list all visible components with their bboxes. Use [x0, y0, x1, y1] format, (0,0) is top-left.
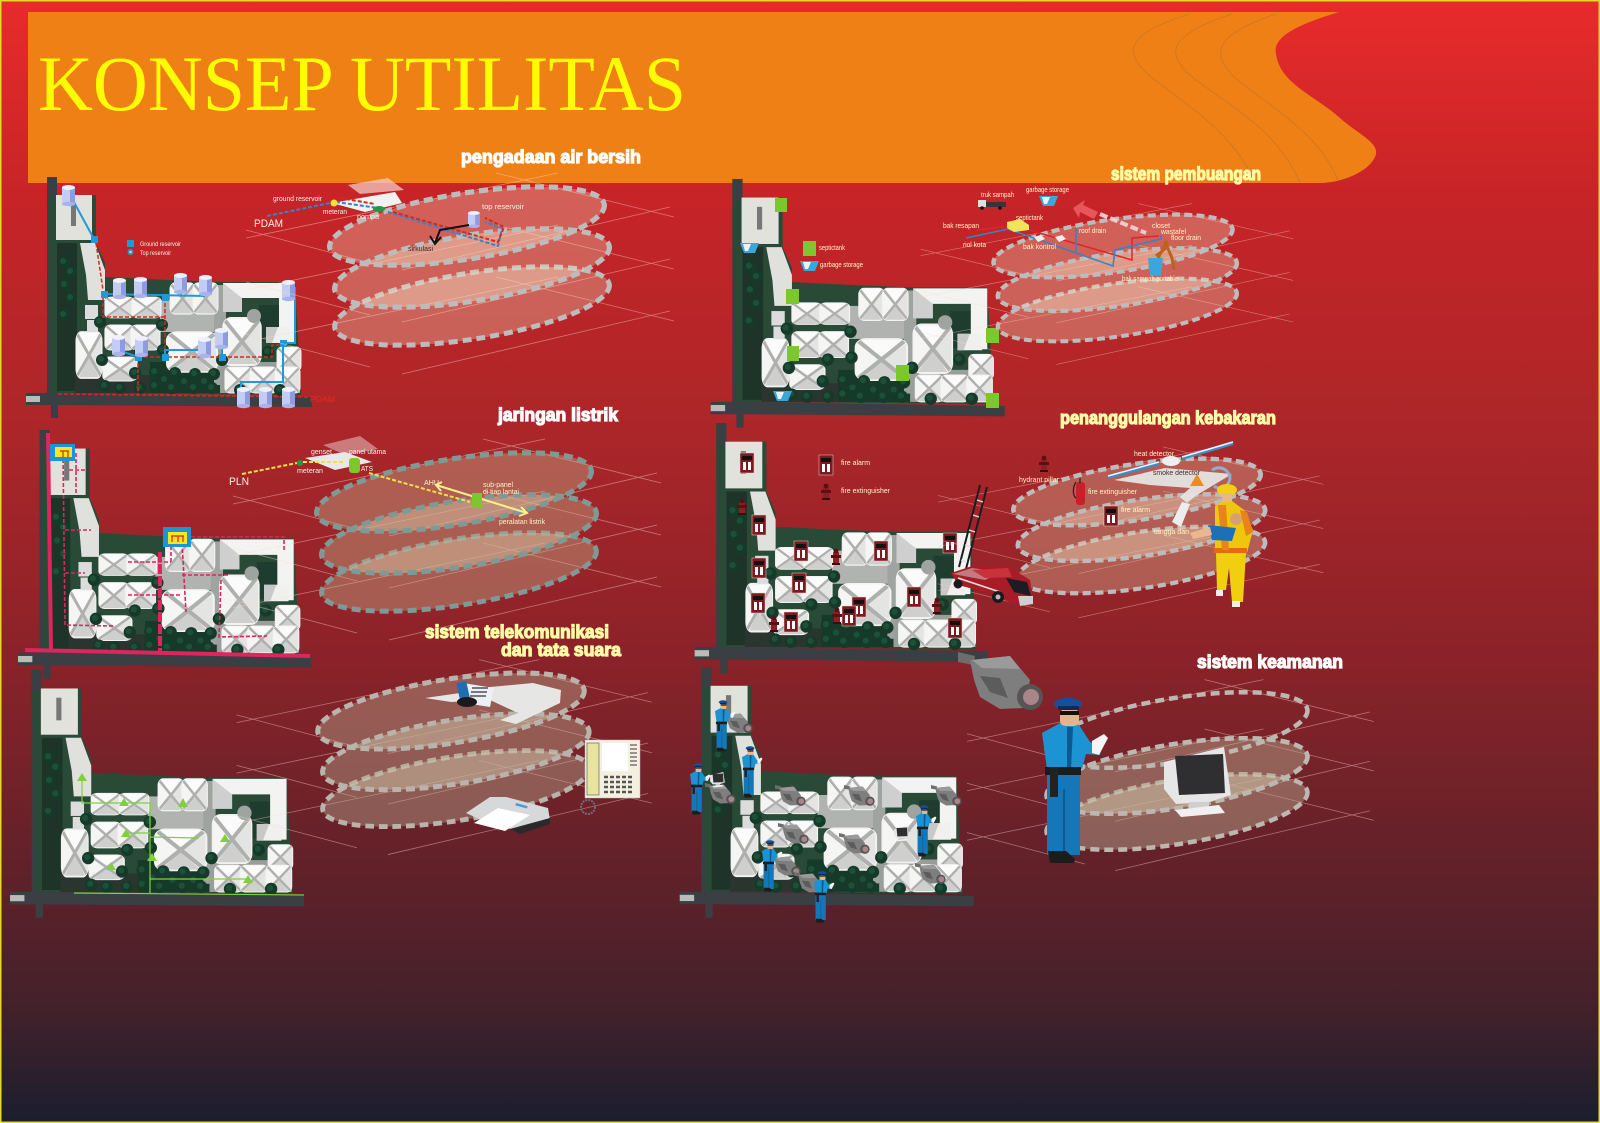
diagram: water flow — [254, 178, 525, 253]
diagram: water flow: top reservoir — [482, 202, 525, 211]
legend: reservoirs — [127, 240, 181, 257]
ellipse stack: floors — [938, 446, 1323, 618]
icon: desk telephone — [581, 740, 640, 814]
panel: sistem keamanan — [680, 651, 1374, 922]
heading: sistem pembuangan: sistem pembuangan — [1111, 163, 1261, 184]
diagram: power flow: meteran — [297, 466, 323, 475]
diagram: waste flow: floor drain — [1171, 233, 1201, 242]
diagram: power flow: AHU — [424, 478, 439, 487]
diagram: water flow: meteran — [323, 207, 347, 216]
diagram: waste flow: roof drain — [1079, 226, 1106, 235]
legend: reservoirs: Ground reservoir — [140, 242, 181, 248]
diagram: waste flow: bak resapan — [943, 221, 979, 230]
label: PDAM red: PDAM — [310, 395, 335, 404]
ellipse stack: floors — [237, 658, 652, 855]
diagram: waste flow: bak kontrol — [1023, 242, 1056, 251]
ellipse stack: floors — [233, 438, 661, 640]
diagram: waste flow — [943, 185, 1201, 283]
diagram: power flow: ATS — [361, 464, 373, 473]
legend: septictank and garbage storage: septictank — [819, 243, 845, 252]
ellipse stack: floors — [967, 678, 1374, 871]
diagram: water flow: PDAM — [254, 218, 283, 230]
diagram: power flow: sub-panel — [483, 480, 513, 489]
panel: sistem pembuangan — [711, 163, 1293, 428]
diagram: water flow: pompa — [357, 212, 380, 221]
site plan: telecom — [10, 670, 304, 918]
title: KONSEP UTILITAS — [38, 40, 686, 127]
diagram: power flow — [229, 436, 545, 526]
heading: sistem telekomunikasi dan tata suara: dan tata suara — [501, 639, 622, 660]
diagram: power flow: di tiap lantai — [483, 487, 519, 496]
floor plan with phone — [425, 681, 561, 724]
diagram: waste flow: riol kota — [963, 240, 987, 249]
site plan: security — [680, 667, 974, 922]
heading: sistem keamanan: sistem keamanan — [1197, 651, 1343, 672]
diagram: waste flow: closet — [1152, 221, 1171, 230]
diagram: fire protection: heat detector — [1134, 449, 1174, 458]
icon: computer monitor — [1164, 747, 1231, 817]
legend: fire alarm and extinguisher: fire extinguisher — [841, 486, 890, 495]
panel: jaringan listrik — [18, 404, 661, 679]
diagram: fire protection: fire alarm — [1121, 505, 1150, 514]
panel: pengadaan air bersih — [26, 146, 674, 418]
legend: fire alarm and extinguisher: fire alarm — [841, 458, 870, 467]
site plan: waste — [711, 179, 1005, 428]
illustration: firefighter carrying child — [1190, 484, 1253, 607]
diagram: waste flow: garbage storage — [1026, 185, 1069, 194]
diagram: power flow: genset — [311, 447, 333, 456]
icon: fax machine — [466, 797, 550, 834]
diagram: power flow: PLN — [229, 476, 249, 488]
ellipse stack: floors — [921, 203, 1293, 364]
illustration: fire truck — [951, 485, 1033, 606]
diagram: fire protection: hydrant pillar — [1019, 475, 1059, 484]
legend: fire alarm and extinguisher — [819, 455, 890, 500]
heading: jaringan listrik: jaringan listrik — [497, 404, 619, 425]
legend: septictank and garbage storage — [800, 241, 863, 271]
site plan: water supply — [26, 177, 312, 418]
orange wave banner — [28, 12, 1376, 183]
heading: penanggulangan kebakaran: penanggulangan kebakaran — [1060, 407, 1276, 428]
diagram: waste flow: bak sampah portable — [1122, 274, 1178, 283]
panel: penanggulangan kebakaran — [695, 407, 1323, 673]
legend: septictank and garbage storage: garbage storage — [820, 260, 863, 269]
panel: sistem telekomunikasi dan tata suara — [10, 621, 652, 918]
site plan: fire — [695, 423, 988, 673]
diagram: water flow: ground reservoir — [273, 194, 322, 203]
heading: sistem telekomunikasi dan tata suara — [425, 621, 622, 660]
diagram: fire protection: tangga dan — [1154, 527, 1189, 536]
site plan: electrical — [18, 430, 311, 679]
diagram: power flow: peralatan listrik — [499, 517, 545, 526]
heading: pengadaan air bersih: pengadaan air bersih — [461, 146, 641, 167]
heading: sistem telekomunikasi dan tata suara: sistem telekomunikasi — [425, 621, 609, 642]
diagram: fire protection: fire extinguisher — [1088, 487, 1137, 496]
diagram: waste flow: wastafel — [1160, 227, 1186, 236]
diagram: power flow: panel utama — [349, 447, 387, 456]
ellipse stack: floors — [246, 172, 674, 374]
diagram: water flow: sirkulasi — [408, 244, 433, 253]
diagram: waste flow: truk sampah — [981, 190, 1014, 199]
diagram: fire protection — [1019, 442, 1233, 536]
illustration: security guard — [1042, 698, 1108, 863]
diagram: fire protection: smoke detector — [1153, 468, 1200, 477]
diagram: waste flow: septictank — [1016, 213, 1043, 222]
icon: video camera — [958, 652, 1043, 710]
legend: reservoirs: Top reservoir — [140, 251, 171, 257]
